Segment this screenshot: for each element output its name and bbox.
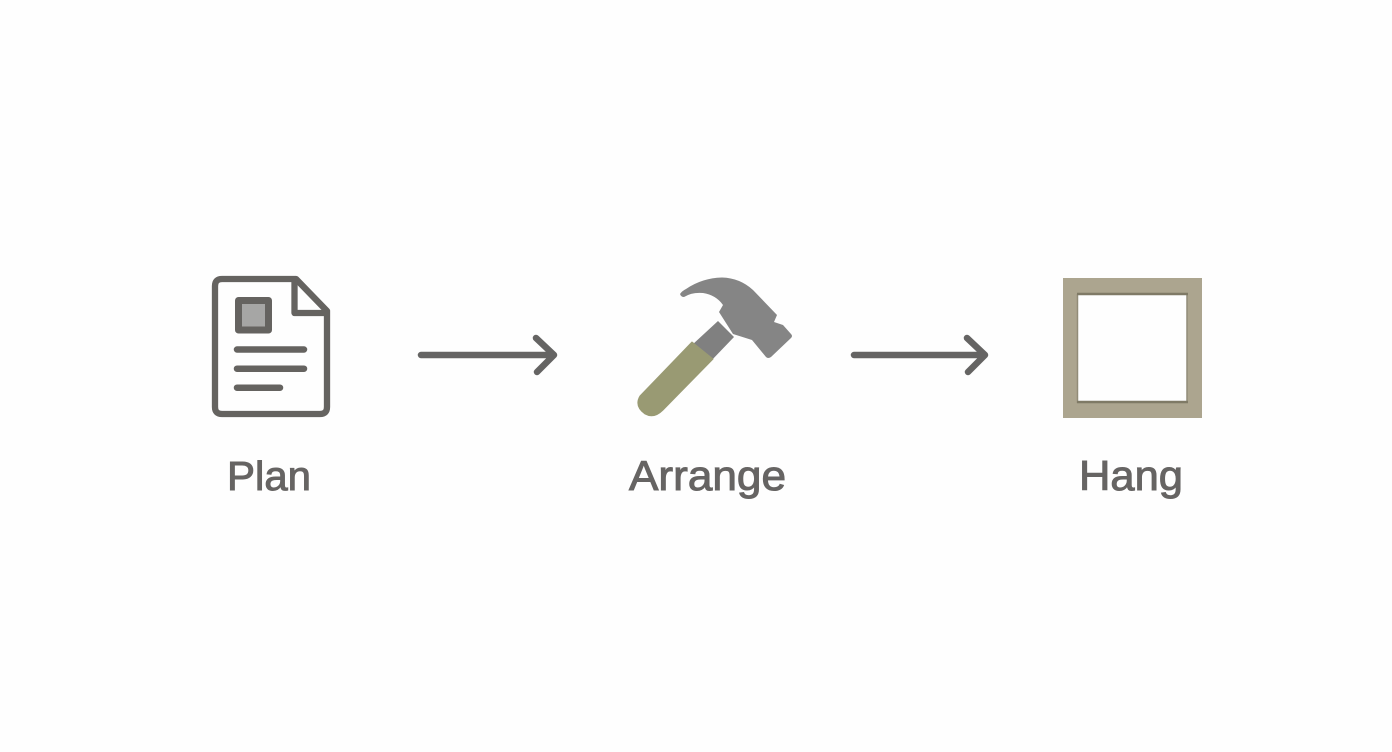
- step: Arrange: [629, 278, 792, 499]
- arrow: Plan to Arrange: [421, 338, 554, 372]
- hammer head: [680, 278, 792, 358]
- step: Plan: [215, 279, 327, 499]
- label: Plan: Plan: [227, 453, 311, 499]
- icon: document: [215, 279, 327, 414]
- icon: hammer: [638, 278, 792, 416]
- hammer grip: [638, 342, 713, 416]
- arrow: Arrange to Hang: [854, 338, 985, 372]
- label: Hang: Hang: [1079, 452, 1183, 499]
- hammer neck: [692, 321, 734, 362]
- icon: picture frame: [1063, 278, 1202, 418]
- label: Arrange: Arrange: [629, 452, 786, 499]
- step: Hang: [1063, 278, 1202, 499]
